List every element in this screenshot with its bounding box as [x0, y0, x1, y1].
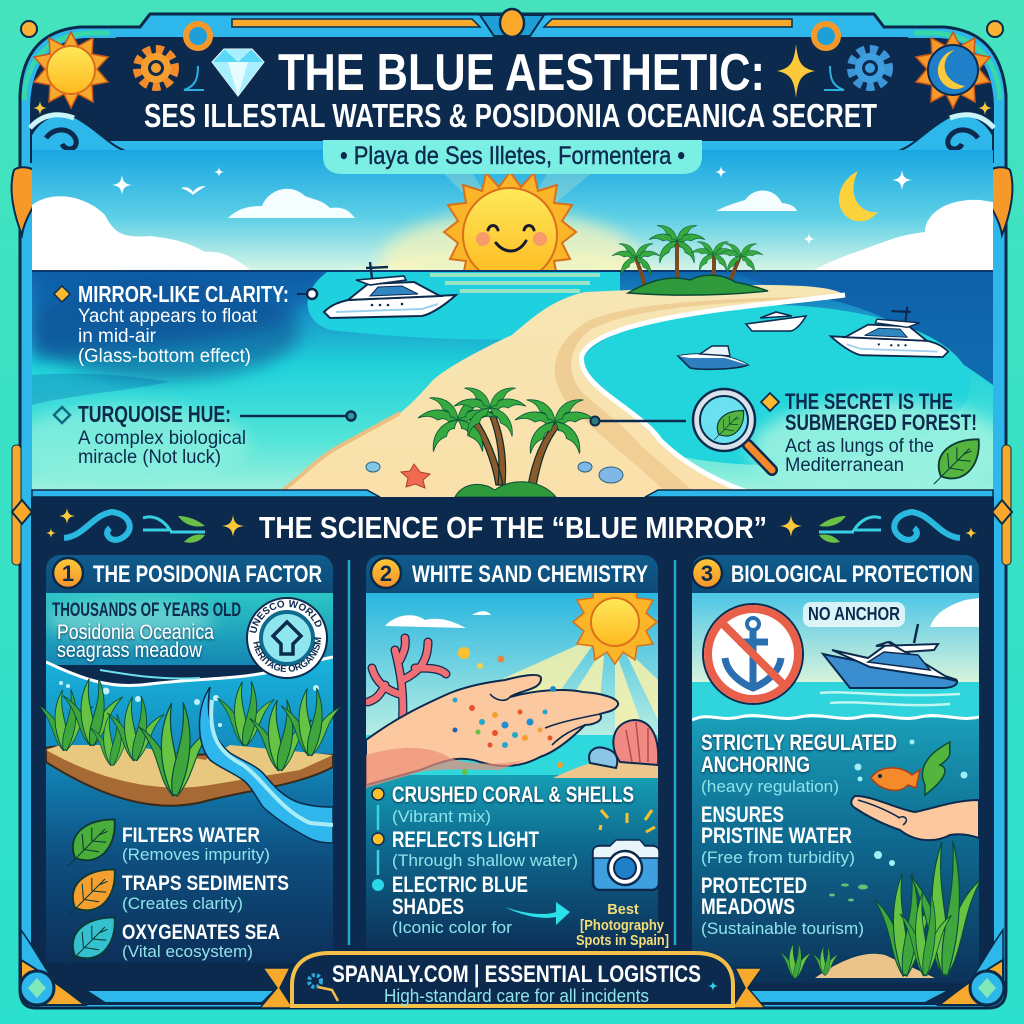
scene lower border — [32, 490, 993, 497]
small fish — [829, 884, 868, 902]
cloud right small — [716, 191, 797, 211]
callout: mirror clarity: MIRROR-LIKE CLARITY: — [78, 281, 289, 307]
yacht: right — [831, 307, 948, 357]
card 1: the Posidonia factor — [38, 555, 341, 964]
card 2 heading: WHITE SAND CHEMISTRY — [412, 561, 648, 588]
island with palms — [612, 221, 768, 295]
icon: diamond — [212, 49, 264, 96]
item: traps sediments: TRAPS SEDIMENTS — [122, 872, 289, 895]
callout: mirror clarity — [30, 280, 317, 380]
sparkles beside medallions — [33, 101, 992, 115]
item: crushed coral — [372, 782, 634, 826]
section heading: THE SCIENCE OF THE “BLUE MIRROR” — [259, 510, 767, 545]
item: reflects light: (Through shallow water) — [392, 851, 578, 870]
footer tagline: High-standard care for all incidents — [384, 986, 649, 1006]
icon: open hand — [851, 796, 979, 840]
bottom frame with corners — [20, 930, 1004, 1005]
item: crushed coral: (Vibrant mix) — [392, 807, 491, 826]
sand beach — [283, 285, 845, 497]
icon: sun medallion — [34, 32, 108, 108]
UNESCO badge: UNESCO WORLD — [250, 600, 322, 633]
icon: moon medallion — [916, 32, 990, 108]
item: pristine water — [701, 802, 855, 867]
sun with face — [442, 174, 578, 270]
text: best photography spots: Spots in Spain] — [576, 933, 669, 949]
bracket left — [184, 66, 204, 90]
icon: corner gem right — [970, 971, 1004, 1005]
stars — [112, 166, 912, 245]
item: protected meadows: PROTECTED — [701, 873, 807, 898]
item: pristine water: (Free from turbidity) — [701, 848, 855, 867]
item: pristine water: PRISTINE WATER — [701, 823, 852, 848]
icon: no anchor sign — [703, 604, 803, 704]
text: seagrass meadow: seagrass meadow — [57, 639, 203, 662]
callout: mirror clarity: Yacht appears to float — [78, 306, 258, 327]
label: no anchor — [803, 602, 905, 627]
cloud right big — [815, 200, 993, 270]
number badge 3: 3 — [701, 561, 713, 586]
number badge 1: 1 — [62, 561, 74, 586]
bird — [181, 186, 206, 195]
icon: camera — [593, 810, 659, 890]
science section panel — [12, 497, 1012, 1005]
coral — [368, 638, 446, 725]
text: thousands of years old: THOUSANDS OF YEARS OLD — [52, 600, 241, 621]
icon: waves right — [896, 114, 994, 165]
sun — [572, 593, 658, 666]
item: reflects light: REFLECTS LIGHT — [392, 827, 539, 852]
callout: turquoise hue: TURQUOISE HUE: — [78, 401, 231, 427]
item: regulated anchoring — [701, 730, 897, 796]
icon: orange gear — [139, 51, 173, 85]
item: protected meadows: MEADOWS — [701, 894, 795, 919]
text: best photography spots — [576, 902, 669, 949]
icon: waves left — [30, 114, 128, 165]
icon: gear and wrench — [309, 975, 338, 1001]
item: oxygenates sea: OXYGENATES SEA — [122, 921, 280, 944]
seagrass meadow — [39, 678, 341, 799]
item: regulated anchoring: ANCHORING — [701, 752, 810, 777]
callout: the secret: Mediterranean — [785, 455, 904, 476]
callout: the secret: SUBMERGED FOREST! — [785, 410, 977, 435]
card 1 heading: THE POSIDONIA FACTOR — [93, 561, 322, 588]
cloud left big — [32, 196, 250, 270]
item: traps sediments — [68, 869, 289, 916]
item: pristine water: ENSURES — [701, 802, 784, 827]
beach scene — [10, 150, 1010, 500]
item: traps sediments: (Creates clarity) — [122, 894, 243, 913]
item: regulated anchoring: STRICTLY REGULATED — [701, 730, 897, 755]
icon: corner gem left — [20, 971, 54, 1005]
callout: turquoise hue — [54, 401, 356, 468]
item: electric blue shades — [372, 872, 528, 937]
sun rays — [344, 174, 675, 270]
item: electric blue shades: ELECTRIC BLUE — [392, 872, 528, 897]
icon: blue gear — [853, 51, 887, 85]
icon: magnifying glass — [590, 389, 772, 470]
label: no anchor: NO ANCHOR — [808, 604, 900, 624]
item: oxygenates sea: (Vital ecosystem) — [122, 942, 253, 961]
text: best photography spots: [Photography — [580, 918, 664, 934]
text: seagrass meadow: Posidonia Oceanica — [57, 621, 214, 644]
number badge 2: 2 — [380, 561, 392, 586]
ornament left — [46, 508, 244, 543]
seagrass — [780, 841, 982, 981]
icon: gold sparkle — [777, 44, 815, 98]
boat: small white — [746, 312, 806, 331]
boat: blue — [678, 346, 748, 369]
main title: THE BLUE AESTHETIC: — [278, 44, 765, 102]
icon: moon — [839, 171, 878, 221]
callout: the secret: THE SECRET IS THE — [785, 389, 953, 414]
item: reflects light — [372, 827, 578, 870]
UNESCO badge: HERITAGE ORGANISM — [253, 637, 322, 672]
footer brand: SPANALY.COM | ESSENTIAL LOGISTICS — [332, 961, 701, 988]
yacht: mirror clarity — [324, 262, 456, 318]
card 3: biological protection — [692, 555, 982, 988]
item: protected meadows: (Sustainable tourism) — [701, 919, 864, 938]
item: filters water — [68, 819, 270, 866]
sandy seabed — [46, 746, 333, 806]
number badge 3 — [692, 558, 722, 588]
shells and sand — [553, 761, 658, 778]
item: filters water: (Removes impurity) — [122, 845, 270, 864]
water stream — [199, 687, 333, 843]
callout: the secret: Act as lungs of the — [785, 436, 934, 457]
cloud left small — [228, 189, 355, 218]
item: electric blue shades: SHADES — [392, 894, 464, 919]
item: regulated anchoring: (heavy regulation) — [701, 777, 839, 796]
icon: sparkle — [708, 981, 718, 991]
sea — [32, 270, 993, 497]
starfish and shells — [366, 462, 623, 488]
card 2: white sand chemistry — [366, 555, 669, 950]
ornament right — [780, 512, 977, 543]
item: protected meadows — [701, 873, 864, 938]
number badge 2 — [371, 558, 401, 588]
item: filters water: FILTERS WATER — [122, 824, 260, 847]
text: seagrass meadow — [57, 621, 214, 662]
sand mound — [815, 954, 935, 978]
icon: fish and plant — [854, 740, 968, 866]
yacht — [823, 624, 957, 688]
callout: mirror clarity: in mid-air — [78, 326, 157, 347]
number badge 1 — [53, 558, 83, 588]
item: crushed coral: CRUSHED CORAL & SHELLS — [392, 782, 634, 807]
location pill: • Playa de Ses Illetes, Formentera • — [340, 142, 685, 170]
footer banner — [260, 953, 765, 1008]
callout: turquoise hue: A complex biological — [78, 428, 246, 449]
text: best photography spots: Best — [607, 902, 639, 918]
bracket right — [824, 66, 844, 90]
item: oxygenates sea — [68, 917, 280, 964]
callout: the secret — [761, 389, 979, 484]
hand with coral grains — [366, 675, 618, 785]
UNESCO badge — [246, 597, 328, 679]
arrow — [505, 902, 570, 925]
palm trees — [418, 383, 595, 497]
item: electric blue shades: (Iconic color for — [392, 918, 512, 937]
callout: turquoise hue: miracle (Not luck) — [78, 447, 221, 468]
sky — [32, 150, 993, 272]
callout: mirror clarity: (Glass-bottom effect) — [78, 346, 251, 367]
header title panel — [30, 24, 994, 165]
